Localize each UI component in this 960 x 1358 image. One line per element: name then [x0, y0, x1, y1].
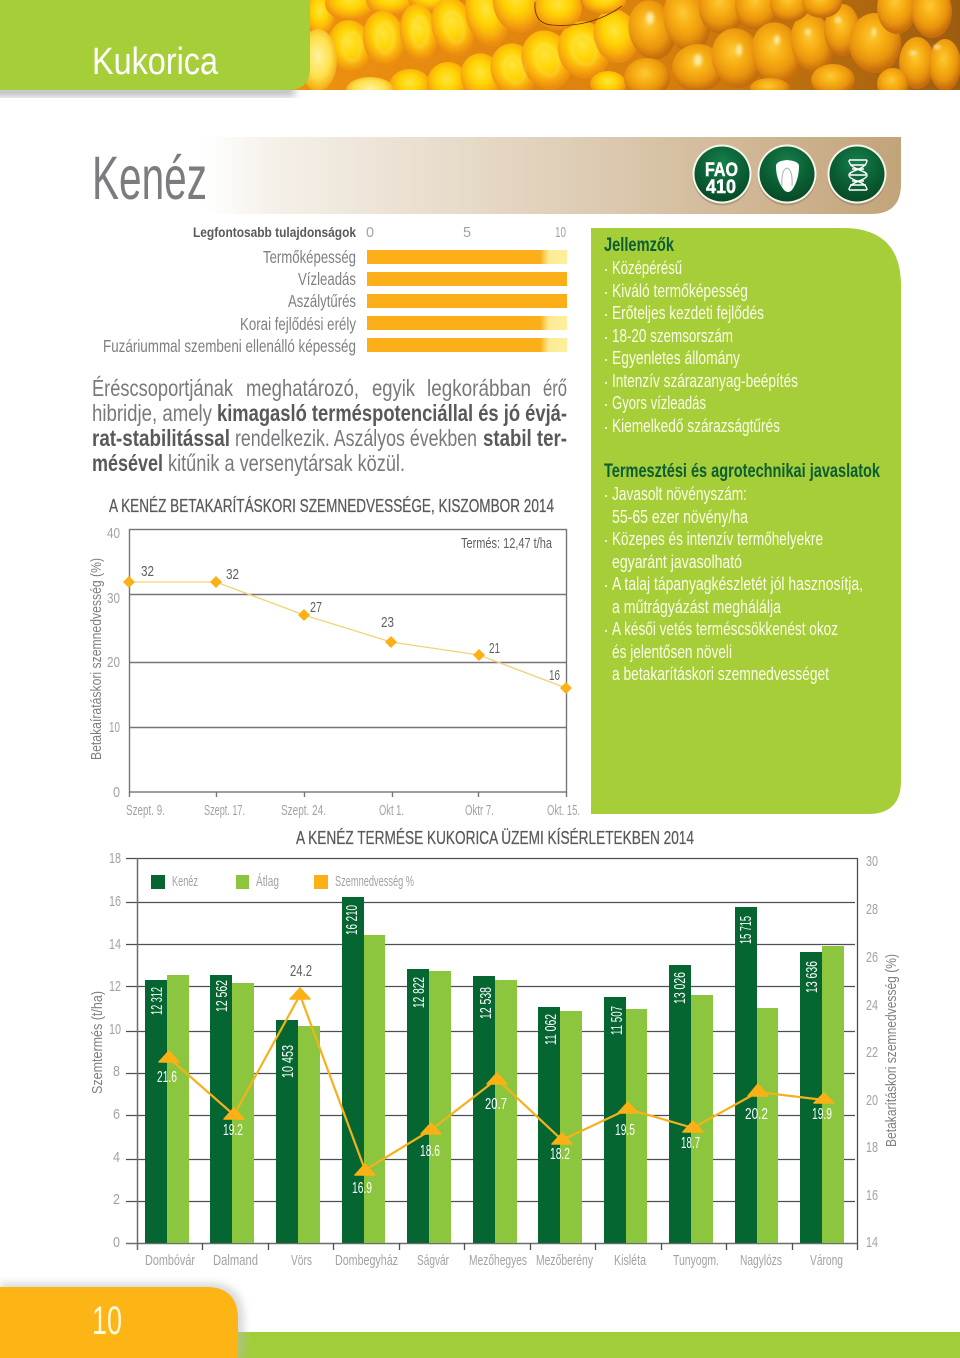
- right y axis labels: 18: [866, 1139, 878, 1156]
- icon: corn kernel: [758, 144, 816, 206]
- list: characteristics: ·: [603, 282, 609, 302]
- location labels: Mezőberény: [536, 1252, 593, 1269]
- property labels: Vízleadás: [298, 269, 356, 289]
- x axis labels: Szept. 9.: [126, 802, 165, 819]
- icon: DNA helix: [828, 144, 886, 206]
- data labels: 21: [489, 640, 500, 657]
- right y axis labels: 16: [866, 1187, 878, 1204]
- data labels: 27: [310, 599, 322, 616]
- heading: Jellemzők: Jellemzők: [604, 235, 674, 256]
- moisture value labels: 19.9: [812, 1106, 832, 1123]
- plot frame and grid: [129, 530, 566, 797]
- moisture value labels: 16.9: [352, 1180, 372, 1197]
- left y axis labels: 18: [109, 850, 121, 867]
- grid and axes: [126, 858, 858, 1250]
- y axis labels: [107, 525, 120, 801]
- header photo: corn kernels: [288, 0, 960, 90]
- right y axis labels: 14: [866, 1234, 878, 1251]
- moisture value labels: 18.6: [420, 1143, 440, 1160]
- list: characteristics: Egyenletes állomány: [612, 347, 741, 368]
- property labels: Termőképesség: [263, 247, 356, 267]
- list: cultivation advice: Közepes és intenzív termőhelyekre: [612, 528, 823, 549]
- left y axis labels: [109, 850, 121, 1251]
- property labels: Korai fejlődési erély: [240, 314, 356, 334]
- bar value labels: 10 453: [280, 1045, 297, 1078]
- header shadow: [0, 87, 295, 96]
- list: characteristics: Kiváló termőképesség: [612, 280, 748, 301]
- list: characteristics: ·: [603, 304, 609, 324]
- left y axis labels: 10: [109, 1021, 121, 1038]
- y axis labels: 10: [109, 719, 120, 736]
- icon: FAO 410: [692, 144, 752, 206]
- panel: characteristics and recommendations: [591, 228, 901, 814]
- list: cultivation advice: [603, 483, 863, 684]
- list: characteristics: 18-20 szemsorszám: [612, 325, 733, 346]
- moisture value labels: 19.2: [223, 1122, 243, 1139]
- list: cultivation advice: Javasolt növényszám:: [612, 483, 747, 504]
- icon: FAO 410: FAO: [705, 160, 738, 181]
- location labels: Dombóvár: [145, 1252, 195, 1269]
- description paragraph: egyik: [372, 375, 415, 401]
- bars: average: [167, 935, 844, 1243]
- description paragraph: stabil ter-: [483, 425, 567, 451]
- title band: [205, 137, 901, 214]
- data labels: Termés: 12,47 t/ha: [461, 535, 552, 552]
- chart title: A KENÉZ TERMÉSE KUKORICA ÜZEMI KÍSÉRLETEKBEN 2014: [296, 828, 694, 848]
- list: characteristics: Gyors vízleadás: [612, 392, 706, 413]
- right y axis labels: 30: [866, 853, 878, 870]
- property labels: Fuzáriummal szembeni ellenálló képesség: [103, 336, 356, 356]
- left y axis labels: 4: [113, 1149, 120, 1166]
- bar value labels: 12 822: [411, 977, 428, 1008]
- description paragraph: hibridje, amely: [92, 400, 212, 426]
- list: characteristics: [603, 257, 798, 437]
- right y axis title: Betakarításkori szemnedvesség (%): [883, 954, 900, 1147]
- description paragraph: mésével: [92, 450, 163, 476]
- description paragraph: Éréscsoportjának: [92, 375, 233, 401]
- right y axis labels: 24: [866, 997, 878, 1014]
- data labels: 16: [549, 667, 560, 684]
- list: cultivation advice: a műtrágyázást meghálálja: [612, 596, 782, 617]
- right y axis labels: 26: [866, 949, 878, 966]
- legend: Kenéz: [172, 873, 198, 890]
- list: characteristics: ·: [603, 327, 609, 347]
- description paragraph: kitűnik a versenytársak közül.: [168, 450, 405, 476]
- moisture value labels: 18.2: [550, 1146, 570, 1163]
- right y axis labels: 28: [866, 901, 878, 918]
- left y axis labels: 0: [113, 1234, 120, 1251]
- list: characteristics: Középérésű: [612, 257, 682, 278]
- y axis labels: 0: [113, 784, 120, 801]
- right y axis labels: 22: [866, 1044, 878, 1061]
- location labels: Vörs: [291, 1252, 312, 1269]
- legend: Átlag: [256, 873, 279, 890]
- description paragraph: meghatározó,: [246, 375, 359, 401]
- chart title: A KENÉZ BETAKARÍTÁSKORI SZEMNEDVESSÉGE, KISZOMBOR 2014: [109, 496, 554, 516]
- bar value labels: 12 538: [478, 987, 495, 1019]
- moisture value labels: [157, 963, 832, 1197]
- data labels: 32: [141, 563, 154, 580]
- property labels: Aszálytűrés: [288, 291, 356, 311]
- heading: cultivation advice: Termesztési és agrotechnikai javaslatok: [604, 461, 880, 482]
- list: cultivation advice: ·: [603, 485, 609, 505]
- properties scale: [366, 224, 566, 241]
- list: characteristics: ·: [603, 417, 609, 437]
- left y axis title: Szemtermés (t/ha): [89, 991, 106, 1094]
- location labels: Várong: [810, 1252, 843, 1269]
- left y axis labels: 16: [109, 893, 121, 910]
- chart: grain moisture at harvest: [88, 496, 580, 819]
- right y axis labels: [866, 853, 878, 1251]
- list: cultivation advice: A talaj tápanyagkészletét jól hasznosítja,: [612, 573, 863, 594]
- moisture value labels: 19.5: [615, 1122, 635, 1139]
- bar value labels: 13 026: [672, 972, 689, 1004]
- x axis labels: Oktr 7.: [465, 802, 494, 819]
- moisture line: [129, 582, 566, 688]
- right y axis labels: 20: [866, 1092, 878, 1109]
- properties heading: Legfontosabb tulajdonságok: [193, 224, 356, 240]
- description paragraph: legkorábban: [427, 375, 531, 401]
- bar value labels: 13 636: [804, 961, 821, 993]
- properties scale: 10: [555, 224, 566, 241]
- left y axis labels: 14: [109, 936, 121, 953]
- list: cultivation advice: A késői vetés terméscsökkenést okoz: [612, 618, 838, 639]
- list: cultivation advice: és jelentősen növeli: [612, 641, 732, 662]
- list: characteristics: ·: [603, 349, 609, 369]
- description paragraph: kimagasló terméspotenciállal és jó évjá-: [217, 400, 567, 426]
- y axis labels: 30: [107, 590, 120, 607]
- header title: Kukorica: Kukorica: [92, 41, 219, 83]
- data labels: 32: [226, 566, 239, 583]
- bar value labels: 11 062: [543, 1014, 560, 1045]
- x axis labels: Szept. 24.: [281, 802, 326, 819]
- property bars: [367, 250, 567, 352]
- properties scale: 0: [366, 224, 374, 241]
- location labels: Kisléta: [614, 1252, 646, 1269]
- moisture value labels: 18.7: [681, 1135, 700, 1152]
- page number: 10: [92, 1299, 122, 1343]
- data labels: [141, 535, 560, 684]
- data labels: 23: [381, 614, 394, 631]
- moisture line: [169, 995, 824, 1170]
- moisture markers: [123, 576, 572, 694]
- list: cultivation advice: 55-65 ezer növény/ha: [612, 506, 749, 527]
- bar value labels: 16 210: [344, 905, 361, 935]
- left y axis labels: 2: [113, 1191, 120, 1208]
- property labels: [103, 247, 356, 356]
- bar value labels: 15 715: [738, 916, 755, 944]
- x axis labels: Okt 1.: [379, 802, 404, 819]
- panel: key properties: [103, 224, 567, 356]
- y axis labels: 40: [107, 525, 120, 542]
- list: cultivation advice: a betakarításkori szemnedvességet: [612, 663, 829, 684]
- x axis labels: Szept. 17.: [204, 802, 245, 819]
- list: cultivation advice: ·: [603, 575, 609, 595]
- description paragraph: [92, 375, 567, 476]
- moisture triangles: [159, 988, 834, 1175]
- list: cultivation advice: ·: [603, 530, 609, 550]
- list: characteristics: Erőteljes kezdeti fejlődés: [612, 302, 764, 323]
- location labels: [145, 1252, 843, 1269]
- header green tab: [0, 0, 310, 90]
- location labels: Ságvár: [417, 1252, 449, 1269]
- bar value labels: [149, 905, 821, 1078]
- footer green bar: [238, 1332, 960, 1358]
- legend: Szemnedvesség %: [335, 873, 414, 890]
- list: characteristics: Intenzív szárazanyag-beépítés: [612, 370, 798, 391]
- location labels: Dombegyház: [335, 1252, 398, 1269]
- description paragraph: érő: [543, 375, 567, 401]
- bar value labels: 11 507: [609, 1006, 626, 1035]
- list: characteristics: Kiemelkedő szárazságtűrés: [612, 415, 780, 436]
- y axis labels: 20: [107, 654, 120, 671]
- moisture value labels: 24.2: [290, 963, 312, 980]
- left y axis labels: 6: [113, 1106, 120, 1123]
- legend: [151, 873, 414, 890]
- title: Kenéz: Kenéz: [92, 144, 207, 212]
- list: characteristics: ·: [603, 372, 609, 392]
- y axis title: Betakaíratáskori szemnedvesség (%): [88, 558, 105, 760]
- left y axis labels: 12: [109, 978, 121, 995]
- list: cultivation advice: ·: [603, 620, 609, 640]
- x axis labels: [126, 802, 580, 819]
- description paragraph: rat-stabilitással: [92, 425, 230, 451]
- moisture value labels: 21.6: [157, 1069, 177, 1086]
- moisture value labels: 20.7: [485, 1096, 507, 1113]
- icon: FAO 410: 410: [706, 177, 736, 198]
- location labels: Tunyogm.: [673, 1252, 719, 1269]
- bar value labels: 12 562: [214, 980, 231, 1012]
- location labels: Mezőhegyes: [469, 1252, 527, 1269]
- list: cultivation advice: egyaránt javasolható: [612, 551, 742, 572]
- chart: yield in plant trials: [89, 828, 900, 1269]
- moisture value labels: 20.2: [745, 1106, 768, 1123]
- properties scale: 5: [463, 224, 471, 241]
- list: characteristics: ·: [603, 394, 609, 414]
- description paragraph: rendelkezik. Aszályos években: [235, 425, 477, 451]
- left y axis labels: 8: [113, 1063, 120, 1080]
- bar value labels: 12 312: [149, 987, 166, 1015]
- list: characteristics: ·: [603, 259, 609, 279]
- footer page tab: [0, 1283, 244, 1358]
- x axis labels: Okt. 15.: [547, 802, 580, 819]
- location labels: Nagylózs: [740, 1252, 782, 1269]
- bars: Kenéz: [145, 897, 822, 1243]
- location labels: Dalmand: [213, 1252, 258, 1269]
